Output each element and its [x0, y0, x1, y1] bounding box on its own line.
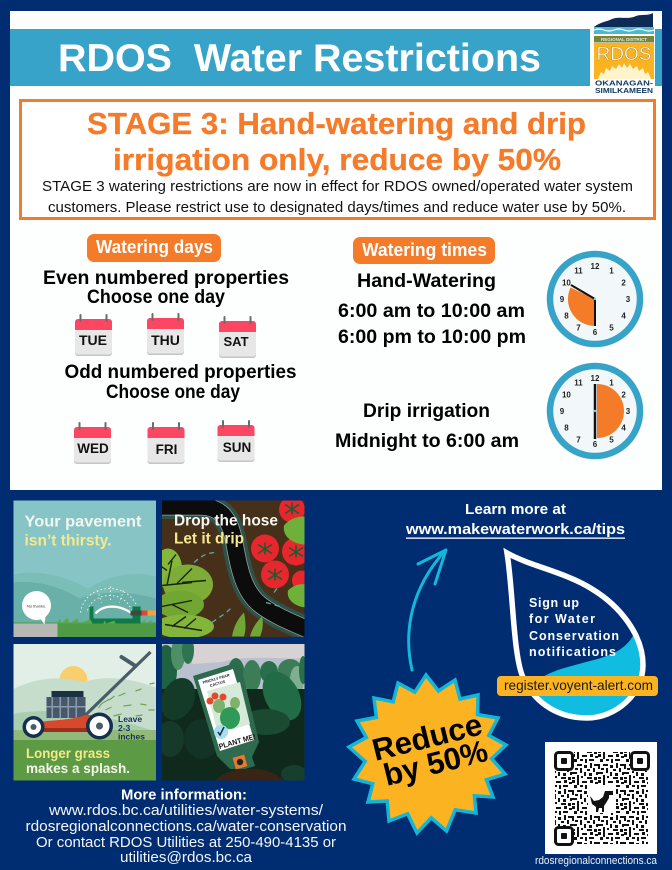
text: sign up: for Water — [529, 612, 595, 626]
title banner — [10, 29, 662, 86]
icon: RDOS logo: OKANAGAN- — [595, 78, 654, 88]
panel: pavement tip image — [14, 500, 156, 637]
icon: clock 6 to 10 — [550, 254, 640, 344]
tomatoes — [251, 496, 312, 590]
leaves — [154, 516, 305, 638]
icon: clock 6 to 10: 2 — [621, 278, 626, 288]
icon: clock 6 to 10: 9 — [560, 295, 565, 304]
text: hand-watering times: Hand-Watering — [357, 270, 496, 292]
panel: stage 3 notice — [20, 100, 654, 218]
panel: drip irrigation tip image — [162, 500, 304, 637]
icon: clock midnight to 6: 4 — [621, 424, 626, 432]
icon: calendar FRI — [148, 422, 184, 464]
callout: reduce by 50% starburst: Reduce — [369, 707, 486, 768]
text: drop the hose: Let it drip — [174, 530, 244, 548]
text: your pavement — [24, 514, 142, 550]
icon: calendar THU: THU — [151, 332, 180, 348]
text: more information: rdosregionalconnections.ca/water-conservation — [26, 818, 346, 835]
panel: longer grass tip image — [14, 644, 156, 780]
text: hand-watering times — [338, 270, 526, 348]
icon: clock 6 to 10: 5 — [609, 324, 614, 333]
text: learn more link: www.makewaterwork.ca/tips — [405, 521, 625, 538]
icon: clock midnight to 6: 9 — [560, 407, 565, 416]
heading: watering times — [353, 237, 495, 264]
text: QR caption: rdosregionalconnections.ca — [535, 855, 658, 867]
icon: calendar WED — [74, 422, 111, 464]
text: leave 2-3 inches: Leave — [118, 714, 142, 724]
icon: clock midnight to 6: 11 — [574, 378, 583, 387]
icon: RDOS logo: RDOS — [596, 44, 652, 64]
heading: watering days — [87, 234, 221, 262]
icon: RDOS logo: SIMILKAMEEN — [595, 86, 653, 95]
text: more information: More information: — [121, 786, 247, 804]
panel: main white restrictions area — [10, 11, 662, 490]
text: hand-watering times: 6:00 pm to 10:00 pm — [338, 326, 526, 348]
icon: calendar FRI: FRI — [156, 442, 177, 457]
text: drop the hose — [174, 512, 278, 548]
icon: RDOS logo — [590, 11, 655, 97]
text: even numbered properties: Choose one day — [87, 287, 225, 308]
text: stage 3 description: customers. Please restrict use to designated days/times and reduce water use by 50%. — [48, 199, 626, 216]
text: odd numbered properties: Odd numbered properties — [64, 362, 296, 383]
icon: clock midnight to 6: 6 — [593, 440, 598, 449]
heading: watering times: Watering times — [362, 240, 487, 260]
icon: clock midnight to 6: 3 — [626, 407, 631, 416]
text: more information: www.rdos.bc.ca/utilities/water-systems/ — [48, 802, 324, 819]
icon: clock 6 to 10: 6 — [593, 328, 598, 337]
icon: clock 6 to 10: 4 — [621, 312, 626, 320]
icon: QR code — [545, 742, 657, 854]
text: stage 3 description — [42, 178, 633, 216]
icon: clock midnight to 6: 1 — [609, 378, 614, 387]
icon: calendar THU — [147, 313, 184, 355]
icon: clock midnight to 6: 12 — [591, 374, 600, 383]
text: drip irrigation times: Drip irrigation — [363, 400, 490, 422]
icon: calendar WED: WED — [77, 441, 109, 456]
icon: clock midnight to 6: 7 — [576, 436, 581, 445]
icon: calendar TUE: TUE — [79, 332, 107, 348]
icon: calendar SAT: SAT — [223, 334, 249, 349]
text: even numbered properties — [43, 268, 289, 308]
icon: clock 6 to 10: 12 — [591, 262, 600, 271]
icon: clock midnight to 6 — [550, 366, 640, 456]
text: more information — [26, 786, 346, 866]
text: sign up: Sign up — [529, 596, 579, 610]
icon: clock 6 to 10: 10 — [562, 278, 571, 288]
text: stage 3 description: STAGE 3 watering restrictions are now in effect for RDOS owned/operated water system — [42, 178, 633, 195]
text: odd numbered properties: Choose one day — [106, 382, 240, 403]
icon: water drop sign-up — [507, 553, 660, 730]
heading: watering days: Watering days — [96, 237, 213, 257]
icon: clock midnight to 6: 5 — [609, 436, 614, 445]
icon: clock 6 to 10: 11 — [574, 266, 583, 275]
text: even numbered properties: Even numbered properties — [43, 268, 289, 289]
plant me sign: CACTUS — [209, 680, 226, 688]
text: sign up: Conservation — [529, 629, 619, 643]
text: leave 2-3 inches: 2-3 — [118, 723, 131, 733]
text: odd numbered properties — [64, 362, 296, 403]
text: your pavement: Your pavement — [24, 514, 142, 530]
icon: calendar SUN: SUN — [223, 440, 251, 455]
plant me sign: PRICKLY PEAR — [202, 673, 230, 685]
icon: clock 6 to 10: 3 — [626, 295, 631, 304]
heading: stage 3: STAGE 3: Hand-watering and drip — [87, 106, 586, 141]
icon: clock 6 to 10: 1 — [609, 266, 614, 275]
heading: stage 3 — [87, 106, 586, 177]
icon: clock midnight to 6: 2 — [621, 390, 626, 400]
icon: RDOS logo: REGIONAL DISTRICT — [601, 37, 647, 42]
icon: clock midnight to 6: 8 — [564, 424, 569, 432]
text: hand-watering times: 6:00 am to 10:00 am — [338, 300, 525, 322]
text: sign up — [529, 596, 619, 659]
icon: clock 6 to 10: 8 — [564, 312, 569, 320]
text: sign up: notifications — [529, 645, 616, 659]
text: more information: Or contact RDOS Utilities at 250-490-4135 or — [36, 834, 336, 851]
text: your pavement: isn’t thirsty. — [24, 532, 112, 550]
text: longer grass — [26, 745, 130, 776]
text: drip irrigation times — [335, 400, 519, 452]
icon: calendar SAT — [219, 316, 256, 358]
plant me sign — [193, 663, 259, 769]
text: learn more link: Learn more at — [465, 501, 566, 518]
panel: watering days — [43, 234, 296, 464]
mower — [22, 652, 150, 740]
icon: calendar SUN — [218, 420, 254, 462]
text: longer grass: makes a splash. — [26, 760, 130, 776]
icon: clock midnight to 6: 10 — [562, 390, 571, 400]
text: longer grass: Longer grass — [26, 745, 110, 761]
callout: reduce by 50% starburst: by 50% — [380, 733, 491, 793]
panel: watering times — [335, 237, 640, 456]
text: leave 2-3 inches — [118, 714, 145, 742]
text: more information: utilities@rdos.bc.ca — [120, 849, 253, 866]
text: learn more link — [405, 501, 625, 539]
text: drip irrigation times: Midnight to 6:00 am — [335, 430, 519, 452]
icon: calendar TUE — [75, 314, 112, 356]
heading: stage 3: irrigation only, reduce by 50% — [113, 142, 561, 177]
callout: reduce by 50% starburst — [349, 675, 506, 833]
icon: clock 6 to 10: 7 — [576, 324, 581, 333]
callout: register link: register.voyent-alert.com — [504, 677, 653, 693]
plant me sign: PLANT ME! — [218, 732, 257, 751]
text: drop the hose: Drop the hose — [174, 512, 278, 530]
title banner: RDOS Water Restrictions — [58, 37, 541, 80]
arrow: to website — [409, 550, 446, 670]
text: leave 2-3 inches: inches — [118, 732, 145, 742]
panel: pavement tip image: No thanks. — [27, 604, 46, 608]
panel: prickly pear cactus image — [162, 644, 304, 780]
